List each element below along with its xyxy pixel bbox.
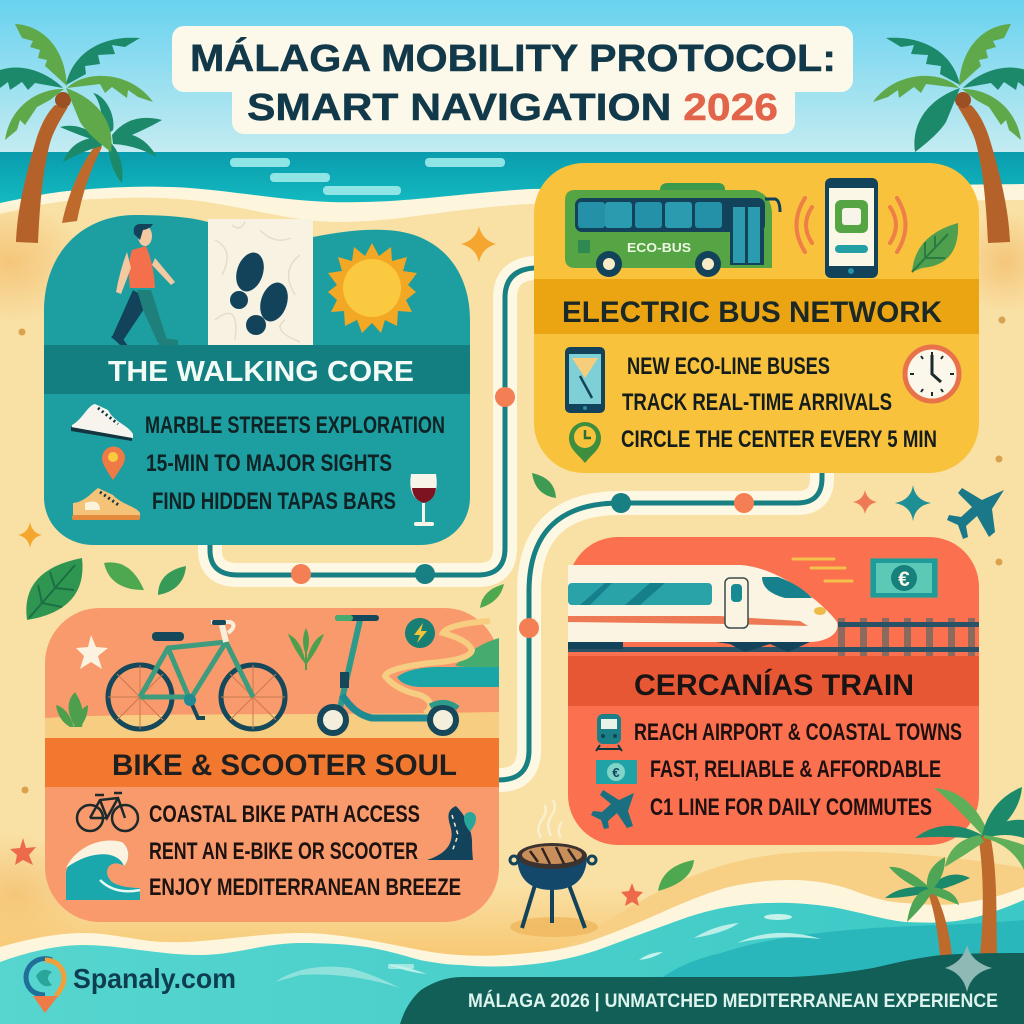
icon: barbecue grill bbox=[510, 800, 598, 937]
icon: tan sneaker bbox=[72, 488, 140, 520]
palm tree small left bbox=[60, 93, 162, 223]
icon: plant middle bbox=[288, 628, 324, 670]
sparkle bbox=[853, 490, 877, 514]
logo: spanaly bbox=[26, 959, 236, 1013]
icon: small bike bbox=[77, 793, 138, 831]
icon: winding road bbox=[427, 806, 476, 860]
icon: ocean wave bbox=[66, 840, 140, 900]
icon: sun bbox=[328, 243, 417, 333]
leaf: monstera bbox=[26, 558, 83, 620]
icon: phone with bus app bbox=[796, 178, 906, 278]
icon: green clock pin bbox=[569, 422, 601, 463]
list: train benefits bbox=[634, 719, 962, 821]
illustration: sand strip bbox=[45, 712, 499, 740]
icon: location pin bbox=[102, 446, 125, 480]
heading band: BIKE & SCOOTER SOUL bbox=[112, 749, 457, 782]
marble street with footprints bbox=[208, 219, 313, 345]
illustration: speed lines bbox=[793, 559, 852, 581]
heading band bbox=[568, 656, 979, 706]
list: bike benefits bbox=[149, 801, 461, 901]
icon: logo mark bbox=[26, 959, 64, 1013]
icon: clock bbox=[905, 347, 959, 401]
icon: eco bus: ECO-BUS bbox=[627, 240, 691, 255]
icon: leaf bbox=[912, 223, 958, 272]
list: walking benefits: 15-MIN TO MAJOR SIGHTS bbox=[146, 450, 392, 477]
icon: wine glass bbox=[410, 474, 437, 526]
decoration: leaves and sparkles on sand bbox=[10, 226, 1006, 906]
list: bus benefits: NEW ECO-LINE BUSES bbox=[627, 353, 830, 380]
icon: plant left bbox=[56, 692, 88, 727]
leaf bbox=[480, 584, 504, 608]
icon: airplane bbox=[947, 488, 1004, 539]
icon: bicycle bbox=[108, 620, 285, 729]
icon: small train bbox=[596, 714, 622, 751]
title line one: MÁLAGA MOBILITY PROTOCOL: bbox=[190, 36, 836, 80]
icon: small plane bbox=[591, 790, 634, 829]
illustration: coastal road and hill bbox=[385, 621, 499, 714]
icon: white sneaker bbox=[71, 404, 133, 441]
panel: electric bus network bbox=[534, 163, 979, 473]
list: bus benefits: CIRCLE THE CENTER EVERY 5 MIN bbox=[621, 426, 937, 453]
icon: euro banknote bbox=[870, 558, 938, 598]
icon: phone with map bbox=[565, 347, 605, 413]
panel: the walking core bbox=[44, 215, 470, 545]
list: walking benefits bbox=[145, 412, 445, 515]
heading band: CERCANÍAS TRAIN bbox=[634, 668, 914, 702]
leaf bbox=[158, 566, 186, 595]
palm tree top right bbox=[873, 24, 1024, 243]
list: walking benefits: MARBLE STREETS EXPLORATION bbox=[145, 412, 445, 439]
brand name: Spanaly.com bbox=[73, 963, 236, 994]
palm tree bottom right small bbox=[885, 857, 970, 957]
list: train benefits: C1 LINE FOR DAILY COMMUTES bbox=[650, 794, 932, 821]
illustration: high-speed train bbox=[568, 565, 838, 652]
sparkle bbox=[945, 945, 992, 992]
icon: small euro note: € bbox=[612, 765, 620, 780]
sparkle bbox=[18, 522, 42, 548]
footer banner bbox=[400, 945, 1024, 1024]
icon: walking person bbox=[111, 224, 178, 346]
palm tree top left bbox=[0, 24, 153, 243]
icon: charging bolt bbox=[405, 618, 435, 648]
title line two: SMART NAVIGATION 2026 bbox=[247, 87, 778, 129]
route stops bbox=[291, 387, 754, 638]
title banner bbox=[172, 26, 853, 134]
icon: euro banknote: € bbox=[898, 568, 910, 591]
list: walking benefits: FIND HIDDEN TAPAS BARS bbox=[152, 488, 396, 515]
leaf bbox=[104, 562, 144, 590]
palm tree bottom right large bbox=[915, 787, 1024, 955]
footer text: MÁLAGA 2026 | UNMATCHED MEDITERRANEAN EXPERIENCE bbox=[468, 990, 998, 1012]
list: bus benefits: TRACK REAL-TIME ARRIVALS bbox=[622, 389, 892, 416]
heading band: ELECTRIC BUS NETWORK bbox=[562, 296, 942, 329]
star bbox=[621, 883, 643, 906]
panel: bike and scooter soul bbox=[45, 608, 499, 922]
dots bbox=[18, 316, 1006, 794]
heading band bbox=[534, 279, 979, 334]
icon: eco bus bbox=[565, 183, 780, 277]
icon: star bbox=[76, 635, 108, 669]
icon: kick scooter bbox=[320, 618, 458, 733]
route lines bbox=[210, 268, 822, 780]
heading band: THE WALKING CORE bbox=[108, 356, 414, 388]
icon: small euro note bbox=[596, 760, 637, 784]
illustration: railway track bbox=[568, 618, 979, 656]
heading band bbox=[45, 738, 499, 787]
list: bike benefits: RENT AN E-BIKE OR SCOOTER bbox=[149, 838, 418, 865]
list: bus benefits bbox=[621, 353, 937, 453]
star bbox=[10, 838, 36, 865]
list: bike benefits: COASTAL BIKE PATH ACCESS bbox=[149, 801, 420, 828]
leaf bbox=[532, 473, 556, 498]
panel: cercanías train bbox=[568, 537, 979, 845]
sparkle bbox=[895, 485, 931, 521]
bottom sea and shoreline bbox=[0, 880, 1024, 1024]
list: bike benefits: ENJOY MEDITERRANEAN BREEZE bbox=[149, 874, 461, 901]
leaf bbox=[658, 860, 694, 891]
heading band bbox=[44, 345, 470, 394]
sparkle bbox=[461, 226, 496, 262]
